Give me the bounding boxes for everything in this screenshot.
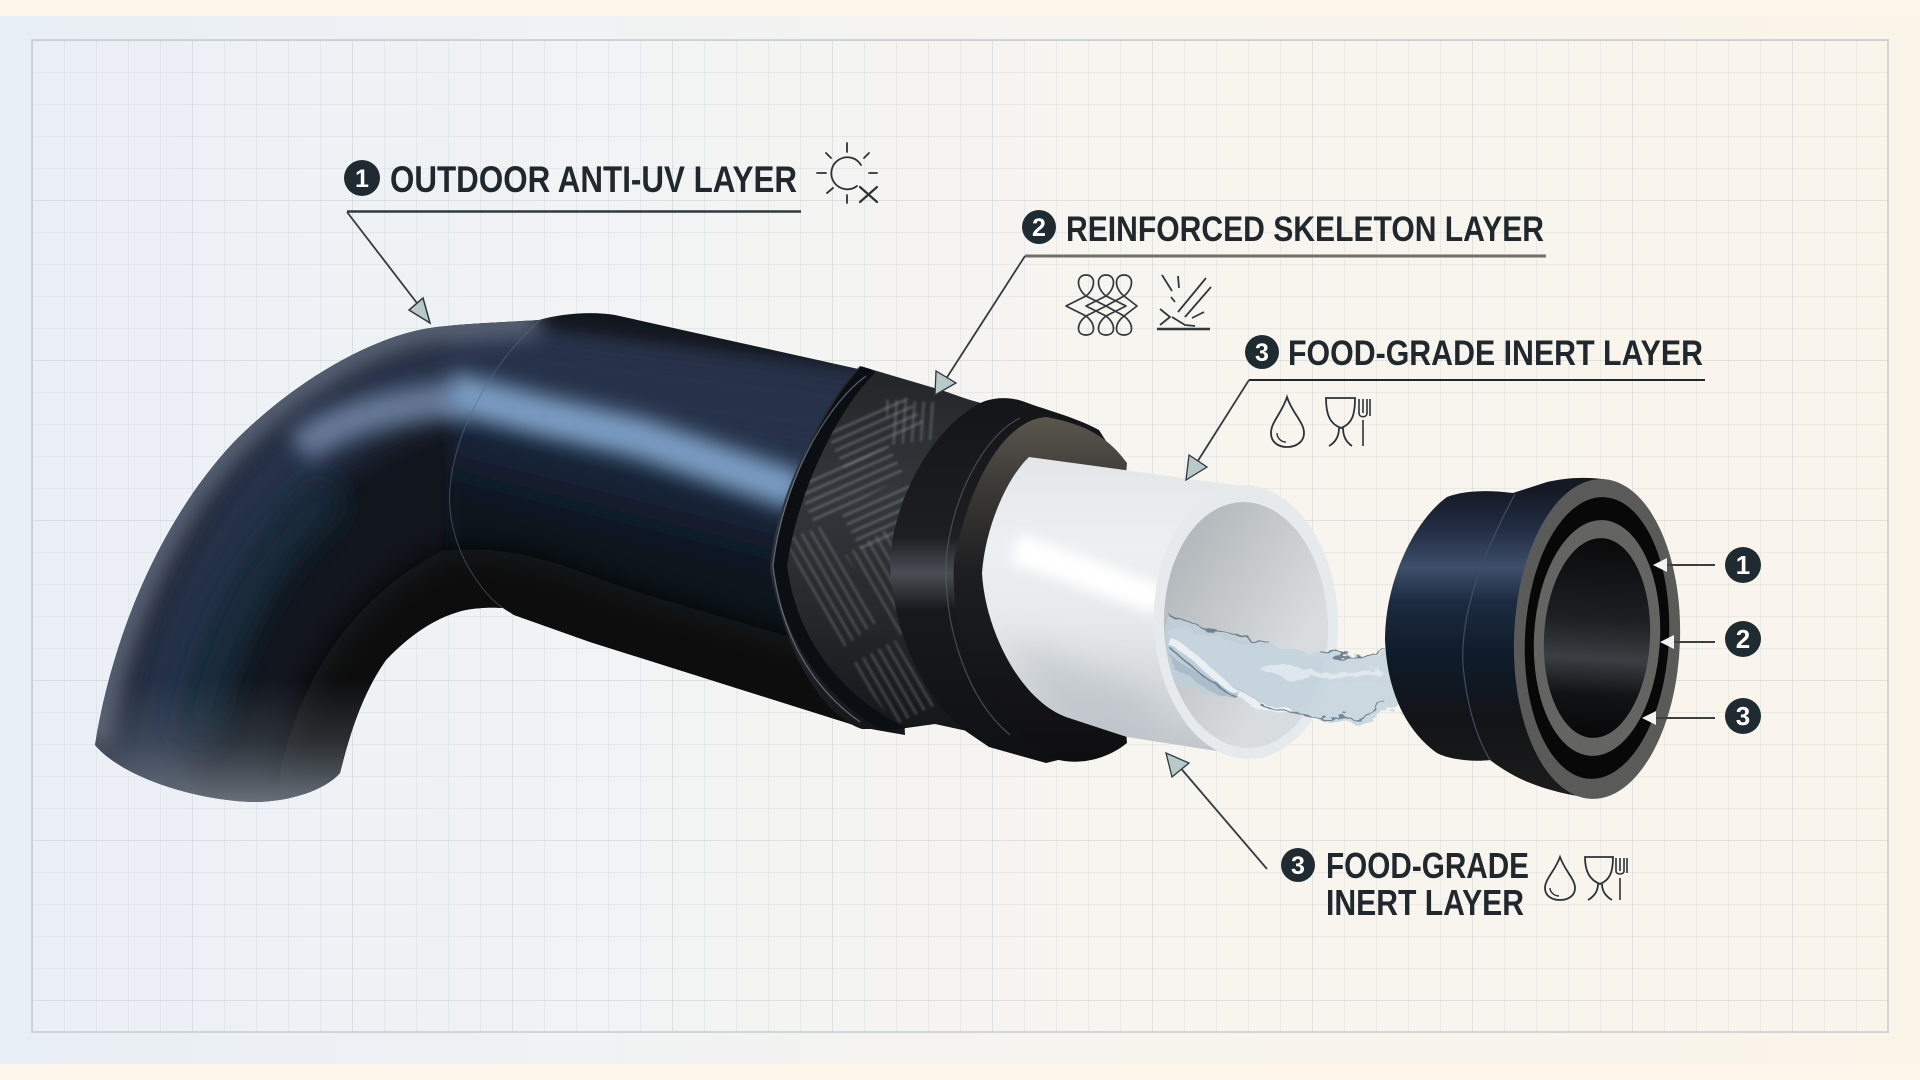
callout: cap marker 3: 3 — [1736, 701, 1750, 731]
icon: water drop — [1271, 397, 1304, 447]
icon: food safe glass and fork (bottom) — [1585, 857, 1627, 900]
icon: food safe glass and fork — [1326, 398, 1370, 446]
callout: cap marker 1 — [1653, 547, 1761, 583]
label 2: reinforced skeleton layer — [1022, 210, 1546, 256]
body end rim — [780, 368, 905, 735]
layer 3: white food-grade inner tube — [982, 457, 1343, 762]
label 2: reinforced skeleton layer: 2 — [1032, 214, 1046, 242]
icon: sun with cross — [817, 143, 877, 203]
cap inner ring — [1528, 517, 1666, 759]
label 3: food-grade inert layer (top) — [1245, 334, 1705, 380]
label 4: food-grade inert layer (bottom): 3 — [1291, 852, 1305, 880]
label 1: outdoor anti-UV layer — [344, 159, 801, 212]
pipe: elbow and outer anti-UV body — [80, 300, 920, 820]
callout: cap marker 3 — [1642, 698, 1761, 734]
icon: abrasion resistance — [1157, 275, 1211, 329]
cap outer face — [1508, 476, 1686, 802]
icon: woven mesh — [1066, 275, 1137, 335]
body rim highlight — [773, 376, 866, 722]
cap black layer — [1518, 493, 1676, 783]
tube bore — [1160, 499, 1332, 751]
label 3: food-grade inert layer (top): FOOD-GRADE INERT LAYER — [1288, 334, 1703, 373]
label 1: outdoor anti-UV layer: OUTDOOR ANTI-UV LAYER — [390, 159, 797, 200]
callout: cap marker 1: 1 — [1736, 550, 1750, 580]
cap bore — [1539, 535, 1655, 741]
layer 2: reinforced braided skeleton — [770, 366, 990, 736]
label 4: food-grade inert layer (bottom) — [1281, 845, 1529, 923]
label 1: outdoor anti-UV layer: 1 — [355, 165, 369, 193]
arrow: label 2 leader — [935, 256, 1025, 395]
layer: dark ring collar — [890, 398, 1127, 763]
callout: cap marker 2 — [1660, 621, 1761, 657]
arrow: label 1 leader — [347, 212, 430, 323]
tube rim — [1149, 482, 1343, 762]
label 4: food-grade inert layer (bottom): INERT LAYER — [1326, 882, 1524, 923]
water stream — [1164, 612, 1400, 721]
callout: cap marker 2: 2 — [1736, 624, 1750, 654]
label 2: reinforced skeleton layer: REINFORCED SKELETON LAYER — [1066, 210, 1544, 249]
icon: water drop (bottom) — [1545, 857, 1575, 900]
arrow: label 3 leader — [1186, 380, 1249, 480]
end cap cross-section — [1385, 476, 1686, 802]
label 3: food-grade inert layer (top): 3 — [1255, 339, 1269, 367]
arrow: label 4 leader — [1166, 753, 1267, 869]
label 4: food-grade inert layer (bottom): FOOD-GRADE — [1326, 845, 1529, 886]
